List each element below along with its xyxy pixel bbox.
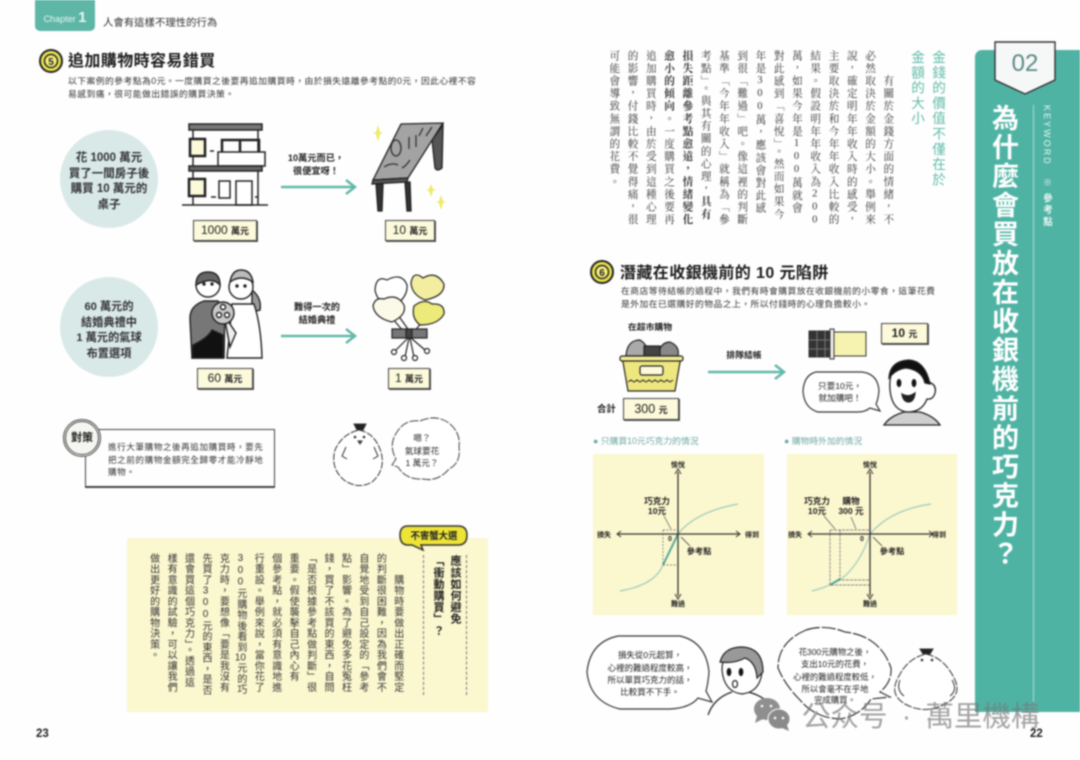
side heading: value of money — [909, 50, 946, 188]
label: total: 合計 — [597, 403, 616, 414]
chart: chocolate only: 損失 — [597, 530, 611, 539]
speech bubble: buying from zero: 心裡的難過程度較高， — [607, 663, 693, 673]
chart: add-on purchase — [786, 454, 958, 616]
speech bubble: buying from zero: 所以單買巧克力的話， — [607, 675, 693, 685]
callout frame — [85, 429, 275, 488]
body text: value of money: 有關於金錢方面的情緒，不 — [882, 75, 893, 226]
callout: countermeasure — [62, 418, 276, 489]
label: 10 yuan: 10 萬元 — [393, 223, 427, 237]
chart: chocolate only: 巧克力 — [644, 495, 670, 506]
speech bubble: buying after 300 yuan: 所以會毫不在乎地 — [802, 684, 869, 694]
label: shopping at the supermarket: 在超市購物 — [628, 322, 672, 332]
chart: chocolate only: 難過 — [671, 599, 685, 608]
speech bubble: just 10 yuan: 就加購吧！ — [819, 392, 861, 403]
panel body text: 樣有意識的試驗，可以讓我們 — [165, 553, 176, 693]
arrow label: once in a lifetime — [294, 301, 340, 325]
icon: table — [370, 121, 446, 213]
chapter tab: Chapter 1 — [44, 9, 86, 26]
body text: value of money: 基準「今年年收入」就稱為「參 — [718, 50, 729, 226]
circle: house and table case: 買了一間房子後 — [69, 168, 149, 180]
circle: house and table case: 桌子 — [98, 198, 120, 210]
body text: value of money: 對此感到「喜悅」。然而如果今 — [773, 50, 784, 221]
circle: wedding case: 1 萬元的氣球 — [76, 332, 142, 344]
arrow: wedding to balloons — [280, 328, 358, 344]
side heading: value of money: 金額的大小 — [909, 50, 924, 126]
icon: bride and groom — [188, 268, 264, 360]
chart: chocolate only: 10元 — [648, 506, 666, 516]
body text: value of money: 追加購買時，由於受到這種心理 — [645, 50, 656, 226]
label: 60 yuan: 60 萬元 — [208, 371, 242, 385]
speech bubble: buying from zero — [585, 634, 714, 711]
body text: value of money: 的影響，付錢比較不覺得痛，很 — [627, 50, 638, 226]
body text: value of money: 年是300萬，應該會對此感 — [754, 50, 765, 215]
heading: section 5: 追加購物時容易錯買 — [68, 53, 216, 70]
section 5 intro text — [68, 76, 476, 99]
icon: section 6 badge: 6 — [599, 268, 605, 279]
body text: value of money: 可能會導致無謂的花費。 — [608, 50, 619, 189]
callout text: 把之前的購物金額完全歸零才能冷靜地 — [108, 455, 263, 465]
speech bubble: just 10 yuan: 只要10元， — [818, 381, 862, 391]
label: 10 yuan — [385, 220, 435, 241]
circle: house and table case: 購買 10 萬元的 — [71, 183, 147, 195]
sidebar title: 為什麼會買放在收銀機前的巧克力？ — [988, 104, 1018, 569]
arrow label: once in a lifetime: 結婚典禮 — [299, 314, 335, 324]
icon: house — [181, 122, 269, 207]
panel body text: 的判斷很困難，因為我們會不 — [374, 553, 385, 693]
arrow label: once in a lifetime: 難得一次的 — [294, 302, 340, 312]
keyword label: KEYWORD ※ 參考點 — [1042, 105, 1053, 228]
panel body text: 重要。假使襲擊自己內心有 — [287, 553, 298, 682]
arrow label: cheap: 10萬元而已， — [288, 153, 344, 163]
circle: wedding case — [60, 277, 158, 377]
chart: add-on purchase: 愉悅 — [863, 460, 877, 469]
speech bubble: buying after 300 yuan — [776, 626, 893, 720]
speech bubble: buying after 300 yuan: 支出10元的花費， — [801, 659, 869, 669]
panel body text: 購物時要做出正確而堅定 — [392, 574, 403, 693]
panel heading: 應該如何避免 — [449, 555, 461, 625]
body text: value of money: 說，確定明年年收入時的感受， — [846, 50, 857, 226]
badge: number 02 — [993, 40, 1057, 96]
chart: add-on purchase: 10元 — [808, 506, 826, 516]
chart: add-on purchase: 巧克力 — [804, 495, 830, 506]
arrow label: cheap: 很便宜呀！ — [293, 166, 339, 176]
panel heading — [432, 554, 462, 636]
chart: add-on purchase: 參考點 — [880, 546, 904, 556]
speech bubble: buying from zero: 損失從0元起算， — [618, 650, 682, 660]
watermark text: · — [902, 701, 911, 733]
circle: wedding case: 布置選項 — [87, 348, 131, 360]
panel heading: 「衝動購買」？ — [432, 555, 444, 636]
sidebar: keyword banner — [975, 50, 1080, 712]
page number 22: 22 — [1030, 728, 1043, 740]
chart: add-on purchase: 損失 — [788, 530, 802, 539]
section 6 intro text: 在商店等待結帳的過程中，我們有時會購買放在收銀機前的小零食，這筆花費 — [621, 286, 935, 296]
panel body text: 行重設。舉例來說，當你花了 — [252, 553, 263, 693]
chapter tab — [35, 0, 95, 31]
speech bubble: buying after 300 yuan: 心裡的難過程度較低， — [793, 672, 877, 682]
legend: add-on purchase: ● 購物時外加的情況 — [784, 436, 862, 446]
speech bubble: balloon question — [390, 416, 461, 482]
heading: section 6: 潛藏在收銀機前的 10 元陷阱 — [620, 265, 829, 282]
body text: value of money — [608, 49, 894, 228]
body text: value of money: 到很「難過」吧。像這裡的判斷 — [736, 50, 747, 226]
panel body text: 300元購物後看到 10 元的巧 — [235, 553, 246, 695]
chart: chocolate only: 參考點 — [687, 546, 711, 556]
body text: value of money: 結果。假設明年年收入為200 — [809, 50, 820, 228]
watermark text: 公众号 萬里機構 — [802, 701, 1040, 733]
label: 1 yuan: 1 萬元 — [395, 371, 423, 385]
body text: value of money: 主要取決於和今年年收入比較的 — [828, 50, 838, 226]
side heading: value of money: 金錢的價值不僅在於 — [930, 50, 945, 188]
panel: avoiding impulse buying — [127, 538, 488, 712]
label: 300 yuan: 300 元 — [634, 402, 668, 416]
panel body text: 克力時，要想像「要是我沒有 — [217, 553, 228, 693]
icon: chick mascot — [332, 422, 384, 487]
section 6 intro text: 是外加在已選購好的物品之上，所以付錢時的心理負擔較小。 — [621, 299, 871, 309]
chart: chocolate only: 得到 — [745, 530, 759, 539]
panel body text: 做出更好的購物決策。 — [148, 553, 159, 660]
icon: section 5 badge — [38, 48, 64, 74]
icon: chick mascot right — [893, 648, 958, 711]
panel body text: 自覺地受到自己設定的「參考 — [357, 553, 368, 693]
circle: house and table case — [60, 130, 158, 228]
chart: chocolate only: 愉悅 — [671, 460, 685, 469]
callout text: 進行大筆購物之後再追加購買時，要先 — [108, 442, 263, 452]
panel body text: 錢，買了不該買的東西，自問 — [322, 553, 333, 693]
badge: pros weigh in: 不害蟹大選 — [411, 530, 458, 541]
circle: wedding case: 60 萬元的 — [84, 301, 134, 313]
arrow label: cheap — [288, 152, 344, 176]
panel rule left — [423, 555, 424, 695]
section 5 intro text: 以下案例的參考點為0元。一度購買之後要再追加購買時，由於損失遠離參考點的0元，因此心裡不容 — [68, 76, 476, 86]
callout text: 購物。 — [108, 467, 135, 477]
panel body text: 點」影響。為了避免多花冤枉 — [339, 553, 350, 693]
chapter title: 人會有這樣不理性的行為 — [103, 18, 217, 29]
speech bubble: balloon question: 嗯？ — [413, 433, 431, 443]
icon: chocolate bar — [808, 328, 868, 360]
icon: balloons — [372, 273, 446, 362]
speech bubble: balloon question: 氣球要花 — [405, 445, 440, 456]
legend: only chocolate: ● 只購買10元巧克力的情況 — [593, 436, 699, 446]
panel body text: 個參考點，就必須有意識地進 — [270, 553, 281, 693]
speech bubble: buying after 300 yuan: 完成購買。 — [814, 695, 856, 705]
icon: watermark chat bubbles — [753, 697, 790, 732]
page number 23: 23 — [36, 728, 49, 740]
chart: add-on purchase: 得到 — [932, 530, 946, 539]
label: 1000 yuan: 1000 萬元 — [201, 223, 249, 237]
arrow: house to table — [280, 178, 358, 196]
speech bubble: balloon question: 1 萬元？ — [406, 457, 438, 468]
body text: value of money: 必然取決於金額的大小。舉例來 — [864, 50, 875, 226]
body text: value of money: 愈小的傾向 。一度購買之後要再 — [663, 50, 674, 226]
speech bubble: just 10 yuan — [801, 370, 882, 414]
sidebar divider — [1033, 105, 1034, 712]
arrow: basket to chocolate — [707, 364, 786, 380]
section 6 intro text — [620, 286, 936, 309]
chart: add-on purchase: 難過 — [863, 599, 877, 608]
badge: pros weigh in — [398, 524, 469, 552]
badge: number 02: 02 — [1012, 50, 1038, 77]
panel rule right — [466, 555, 467, 695]
icon: shopping basket — [618, 338, 685, 393]
label: 1 yuan — [388, 368, 430, 389]
label: 1000 yuan — [193, 220, 257, 241]
section 5 intro text: 易感到痛，很可能做出錯誤的購買決策。 — [68, 88, 234, 98]
panel body text: 先買了300元的東西，是否 — [200, 553, 211, 696]
speech bubble: buying from zero: 比較買不下手。 — [620, 687, 680, 697]
chart: add-on purchase: 購物 — [842, 495, 860, 506]
callout badge: 對策 — [71, 432, 93, 444]
panel body text: 「是否根據參考點做判斷」很 — [305, 553, 316, 693]
label: 10 yuan chocolate: 10 元 — [892, 326, 917, 340]
body text: value of money: 損失距離參考點愈遠，情緒變化 — [681, 50, 692, 226]
icon: woman — [706, 645, 765, 716]
chart: add-on purchase: 0 — [860, 536, 864, 543]
label: 10 yuan chocolate — [881, 323, 928, 344]
circle: house and table case: 花 1000 萬元 — [76, 152, 142, 164]
panel body text — [148, 552, 405, 696]
arrow label: queue to checkout: 排隊結帳 — [726, 350, 762, 360]
label: 60 yuan — [197, 368, 253, 389]
callout text — [108, 442, 264, 477]
body text: value of money: 考點」。與其有關的心理， 具有 — [700, 50, 711, 221]
chart: chocolate only — [592, 454, 764, 616]
circle: wedding case: 結婚典禮中 — [81, 316, 137, 328]
icon: section 6 badge — [589, 259, 615, 285]
body text: value of money: 萬，如果今年是100萬就會 — [791, 50, 802, 215]
panel body text: 還會買這個巧克力」。透過這 — [183, 553, 194, 688]
speech bubble: buying after 300 yuan: 花300元購物之後， — [799, 647, 871, 657]
callout badge — [63, 419, 101, 457]
label: 300 yuan — [623, 398, 679, 420]
icon: section 5 badge: 5 — [48, 57, 54, 68]
chart: chocolate only: 0 — [668, 536, 672, 543]
icon: man — [882, 358, 942, 427]
chart: add-on purchase: 300 元 — [838, 506, 864, 516]
